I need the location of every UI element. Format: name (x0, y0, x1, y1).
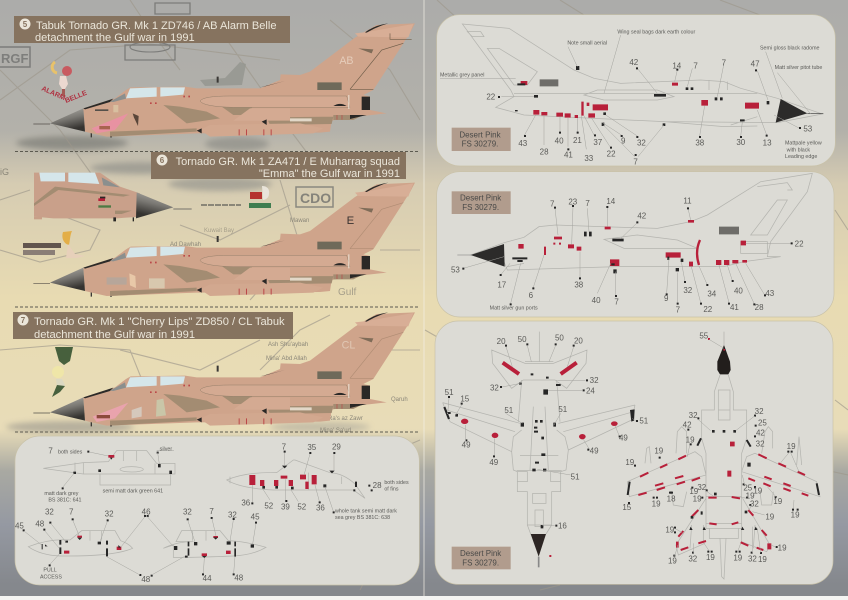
desert pink swatch: FS 30279. (462, 140, 498, 149)
metallic grey panel (719, 227, 739, 234)
callout leaders and numbers: Note small aerial (567, 41, 607, 47)
diagram: left store: 7 (69, 508, 74, 517)
diagram: large tank: 39 (281, 502, 290, 511)
panel: plan views stencil placement (435, 321, 833, 584)
callout leaders and numbers: 40 (592, 296, 601, 305)
callout leaders and numbers: 40 (734, 286, 743, 295)
background map collage: Qaruh (391, 397, 408, 403)
aircraft outline (462, 24, 822, 127)
underside callouts: 19 (746, 491, 755, 500)
top view red stencils: 49 (590, 447, 599, 456)
desert pink swatch: FS 30279. (462, 558, 499, 567)
diagram: large tank: sea grey BS 381C: 638 (335, 515, 390, 521)
diagram: left store: ACCESS (40, 574, 62, 580)
title banner: aircraft 6: 6 (160, 156, 165, 165)
diagram: large tank: 29 (332, 442, 341, 451)
underside callouts: 19 (753, 486, 763, 495)
callout leaders and numbers: 23 (568, 198, 578, 207)
diagram: right store: 44 (203, 574, 212, 583)
callout leaders and numbers: 22 (486, 92, 496, 101)
diagram: left store: 48 (35, 520, 45, 529)
diagram: large tank: 35 (307, 443, 317, 452)
diagram: left store: PULL (43, 568, 57, 574)
underside callouts: 19 (791, 510, 800, 519)
callout leaders and numbers: 42 (629, 58, 639, 67)
callout leaders and numbers: 28 (755, 303, 764, 312)
underside callouts: 19 (668, 556, 677, 565)
callout leaders and numbers: 38 (695, 139, 705, 148)
callout leaders and numbers: 33 (584, 154, 594, 163)
diagram: large tank: 7 (282, 442, 287, 451)
aircraft 6: Tornado ZA471 side profile: E (347, 215, 355, 227)
top view red stencils: 49 (619, 433, 628, 442)
diagram: pylon store top: 7 (48, 447, 53, 456)
diagram: pylon store top (43, 447, 175, 503)
top view red stencils (443, 334, 649, 557)
callout leaders and numbers: 7 (676, 305, 681, 314)
radome (776, 99, 807, 123)
title banner: aircraft 7: 7 (21, 316, 26, 325)
diagram: right store: 32 (228, 510, 237, 519)
top view red stencils: 15 (460, 395, 470, 404)
desert pink swatch: Desert Pink (460, 549, 501, 558)
underside callouts: 55 (699, 331, 709, 340)
underside view outline and red stencils (627, 332, 820, 579)
top view red stencils: 32 (490, 383, 499, 392)
red stencil markers (518, 220, 747, 266)
diagram: right store: 32 (183, 507, 192, 516)
underside callouts: 19 (625, 458, 635, 467)
callout leaders and numbers (451, 197, 804, 314)
diagram: pylon store top: matt dark grey (44, 491, 79, 497)
title banner: aircraft 7: detachment the Gulf war in 1991 (34, 329, 195, 341)
underside callouts: 42 (683, 421, 692, 430)
diagram: large tank: whole tank semi matt dark (335, 509, 397, 515)
diagram: right store: 7 (209, 507, 214, 516)
diagram: large tank: 36 (316, 504, 325, 513)
callout leaders and numbers: 41 (730, 303, 739, 312)
top view red stencils: 51 (558, 405, 568, 414)
top view red stencils: 50 (555, 334, 564, 343)
underside callouts: 19 (654, 447, 664, 456)
underside callouts: 19 (778, 544, 787, 553)
callout leaders and numbers: 28 (540, 147, 549, 156)
underside callouts: 19 (693, 495, 702, 504)
top view red stencils: 51 (639, 416, 649, 425)
underside callouts: 42 (756, 428, 765, 437)
callout leaders and numbers: Wing seal bags dark earth colour (617, 29, 695, 35)
title banner: aircraft 5: Tabuk Tornado GR. Mk 1 ZD746 / AB Alarm Belle (36, 20, 276, 32)
aircraft 6 nose close-up (34, 173, 192, 221)
callout leaders and numbers: 13 (763, 138, 772, 147)
underside callouts: 32 (750, 500, 759, 509)
desert pink swatch: Desert Pink (459, 130, 501, 139)
background map collage: RGF (1, 51, 28, 66)
top view red stencils: 16 (558, 522, 567, 531)
top view red stencils: 49 (462, 441, 471, 450)
diagram: large tank: 36 (241, 499, 251, 508)
callout leaders and numbers: 7 (550, 200, 555, 209)
callout leaders and numbers: Semi gloss black radome (760, 46, 820, 52)
underside callouts: 32 (755, 407, 764, 416)
underside callouts (622, 331, 800, 565)
diagram: left store: 48 (141, 575, 151, 584)
callout leaders and numbers: 42 (637, 211, 647, 220)
nose art: Emma (23, 186, 271, 258)
callout leaders and numbers: 38 (574, 281, 584, 290)
callout leaders and numbers: Matt silver pitot tube (775, 65, 822, 71)
background map collage: iG (0, 167, 9, 177)
top view red stencils: 20 (497, 337, 506, 346)
top view red stencils: 51 (445, 388, 454, 397)
callout leaders and numbers: 34 (707, 289, 717, 298)
diagram: right store: 45 (251, 513, 260, 522)
diagram: pylon store top: semi matt dark green 641 (103, 488, 163, 494)
underside callouts: 32 (688, 554, 698, 563)
aircraft 6: Tornado ZA471 side profile (33, 183, 415, 297)
aircraft 7: Tornado ZD850 side profile: CL (342, 339, 355, 351)
callout leaders and numbers: 7 (614, 298, 619, 307)
callout leaders and numbers (440, 29, 822, 167)
callout leaders and numbers: 32 (683, 286, 693, 295)
underside callouts: 32 (689, 411, 698, 420)
top view red stencils: 24 (586, 386, 595, 395)
underside callouts: 32 (697, 483, 707, 492)
callout leaders and numbers: 47 (751, 60, 760, 69)
callout leaders and numbers: 22 (795, 239, 804, 248)
underside callouts: 32 (756, 439, 765, 448)
underside callouts: 19 (765, 512, 775, 521)
callout leaders and numbers: 7 (722, 59, 727, 68)
background map collage: Ash Shu'aybah (268, 342, 308, 348)
title banner: aircraft 6: Tornado GR. Mk 1 ZA471 / E Muharrag squad (176, 156, 400, 168)
top view red stencils: 32 (590, 376, 599, 385)
underside callouts: 19 (706, 553, 715, 562)
callout leaders and numbers: 40 (555, 136, 564, 145)
top view red stencils: 49 (489, 458, 499, 467)
diagram: right store (163, 507, 266, 583)
underside callouts: 19 (665, 526, 675, 535)
callout leaders and numbers: Mattpale yellow (785, 141, 822, 147)
diagram: left store: 45 (15, 522, 24, 531)
callout leaders and numbers: 53 (803, 125, 813, 134)
callout leaders and numbers: 14 (606, 197, 616, 206)
callout leaders and numbers: 41 (564, 150, 573, 159)
background map collage: Ra's az Zawr (328, 416, 363, 422)
top view outline (443, 332, 635, 534)
desert pink swatch (452, 547, 511, 569)
callout leaders and numbers: 7 (633, 158, 638, 167)
callout leaders and numbers: 37 (593, 138, 603, 147)
background map collage: Gulf (338, 287, 357, 298)
diagram: left store: 46 (142, 508, 151, 517)
underside callouts: 18 (667, 494, 676, 503)
callout leaders and numbers: 43 (765, 289, 775, 298)
callout leaders and numbers: 11 (683, 197, 692, 206)
callout leaders and numbers: 43 (518, 139, 528, 148)
aircraft outline (471, 173, 812, 270)
diagram: left store (15, 507, 185, 584)
title banner: aircraft 5 (14, 16, 290, 44)
panel: stores stencil diagrams (15, 436, 419, 585)
callout leaders and numbers: Matt silver gun ports (490, 305, 538, 311)
diagram: large tank (227, 442, 409, 521)
callout leaders and numbers: 30 (736, 138, 746, 147)
nose art: Alarm Belle: BELLE (64, 90, 88, 105)
nose art: Alarm Belle (40, 62, 88, 105)
nose art: Cherry Lips (52, 347, 73, 397)
callout leaders and numbers: 7 (585, 199, 590, 208)
background map collage: Kuwait Bay (204, 228, 234, 234)
nose art: Alarm Belle: ALARM (40, 85, 66, 102)
underside callouts: 19 (733, 554, 743, 563)
diagram: pylon store top: silver (160, 447, 172, 453)
callout leaders and numbers: 22 (703, 305, 713, 314)
diagram: pylon store top: both sides (58, 450, 83, 456)
title banner: aircraft 6: "Emma" the Gulf war in 1991 (259, 168, 400, 180)
callout leaders and numbers: 22 (607, 150, 616, 159)
underside callouts: 19 (773, 497, 783, 506)
background map collage: Mina' Sa'ud (320, 428, 351, 434)
background map collage: Mina' Abd Allah (266, 356, 307, 362)
divider lines (15, 152, 420, 432)
diagram: left store: 32 (105, 510, 114, 519)
diagram: right store: 48 (234, 574, 244, 583)
diagram: left store: 32 (45, 507, 54, 516)
callout leaders and numbers: 53 (451, 266, 460, 275)
panel: left side view stencil placement (437, 15, 835, 167)
title banner: aircraft 7 (13, 312, 293, 341)
underside callouts: 19 (787, 442, 796, 451)
top view black nose (531, 534, 546, 557)
diagram: pylon store top: BS 381C: 641 (48, 497, 82, 503)
callout leaders and numbers: 6 (529, 291, 534, 300)
top view red stencils: 20 (574, 337, 583, 346)
diagram: large tank: both sides (384, 480, 409, 486)
diagram: large tank: of fins (384, 487, 399, 493)
callout leaders and numbers: 14 (672, 61, 682, 70)
desert pink swatch (452, 191, 511, 214)
callout leaders and numbers: Metallic grey panel (440, 72, 484, 78)
background map collage: CDO (300, 190, 331, 206)
callout leaders and numbers: Leading edge (785, 154, 817, 160)
underside callouts: 25 (758, 418, 767, 427)
underside callouts: 15 (622, 503, 632, 512)
callout leaders and numbers: 21 (573, 136, 582, 145)
underside callouts: 19 (686, 435, 695, 444)
top view red stencils: 51 (504, 406, 514, 415)
metallic grey panel (540, 79, 558, 86)
title banner: aircraft 7: Tornado GR. Mk 1 "Cherry Lips" ZD850 / CL Tabuk (34, 316, 285, 328)
callout leaders and numbers: 9 (664, 294, 669, 303)
underside callouts: 19 (689, 487, 699, 496)
desert pink swatch (452, 128, 511, 151)
callout leaders and numbers: 32 (637, 139, 646, 148)
background map collage: Mawan (290, 218, 309, 224)
desert pink swatch: FS 30279. (462, 203, 499, 212)
underside callouts: 32 (748, 554, 757, 563)
radome (471, 238, 522, 267)
callout leaders and numbers: 9 (621, 137, 626, 146)
diagram: large tank: 52 (264, 502, 274, 511)
background map collage: Ad Dawhah (170, 242, 201, 248)
desert pink swatch: Desert Pink (460, 194, 501, 203)
top view red stencils: 50 (518, 335, 527, 344)
aircraft 7: Tornado ZD850 side profile (33, 312, 415, 426)
title banner: aircraft 6 (151, 152, 406, 180)
underside callouts: 19 (652, 500, 661, 509)
panel: right side view stencil placement (437, 172, 834, 317)
aircraft 5: Tabuk Tornado ZD746 side profile: AB (339, 55, 354, 67)
top view red stencils: 51 (571, 472, 580, 481)
title banner: aircraft 5: detachment the Gulf war in 1991 (35, 32, 195, 44)
underside callouts: 25 (743, 483, 753, 492)
callout leaders and numbers: 17 (497, 281, 507, 290)
callout leaders and numbers: with black (787, 147, 810, 153)
aircraft 5: Tabuk Tornado ZD746 side profile (33, 23, 415, 137)
diagram: large tank: 52 (297, 502, 307, 511)
underside callouts: 19 (758, 555, 767, 564)
callout leaders and numbers: 7 (693, 61, 698, 70)
diagram: large tank: 28 (373, 481, 382, 490)
title banner: aircraft 5: 5 (23, 20, 28, 29)
red stencil markers (521, 81, 759, 118)
